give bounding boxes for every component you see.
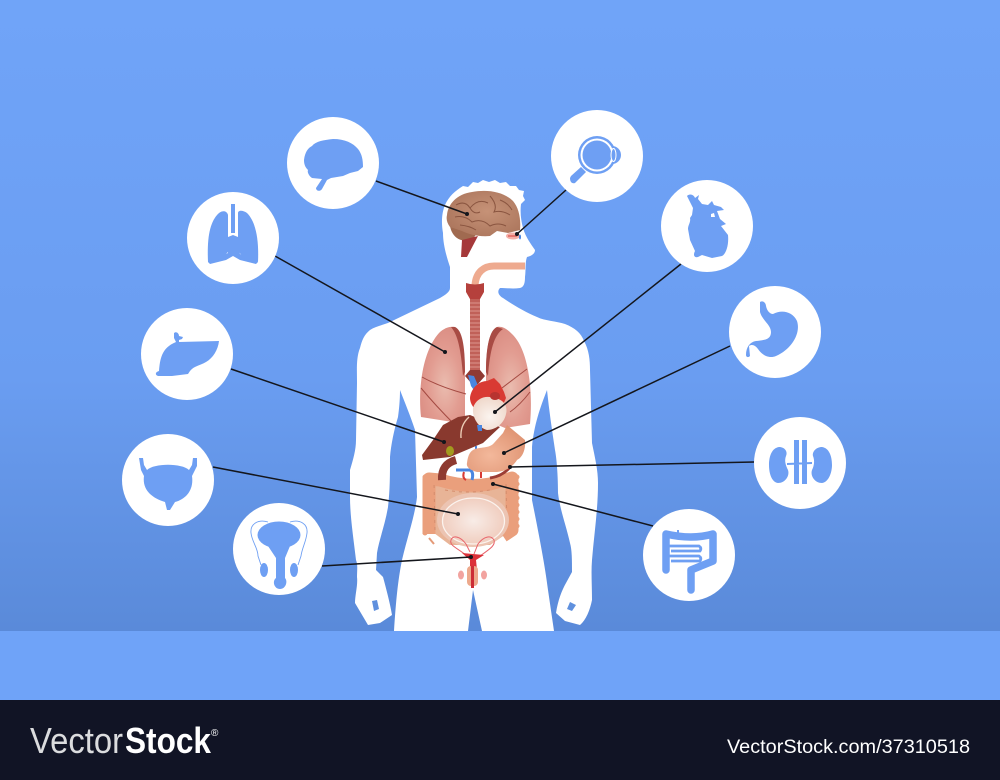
large intestine xyxy=(425,475,517,545)
bladder xyxy=(437,493,509,547)
reproductive organs xyxy=(451,537,494,588)
liver xyxy=(422,415,500,460)
logo text: Vector xyxy=(30,720,123,761)
icon: bladder xyxy=(122,434,214,526)
thyroid and trachea xyxy=(465,283,485,384)
pharynx tube xyxy=(475,266,525,285)
organ group xyxy=(420,191,531,588)
kidneys and vessels xyxy=(442,446,510,480)
leader lines xyxy=(213,181,754,566)
lungs xyxy=(420,327,531,428)
icon: brain xyxy=(287,117,379,209)
icon: kidneys xyxy=(754,417,846,509)
icon: stomach xyxy=(729,286,821,378)
floor band xyxy=(0,631,1000,700)
icon: lungs xyxy=(187,192,279,284)
hand marks xyxy=(372,600,576,611)
icon: eye with magnifier xyxy=(551,110,643,202)
logo text xyxy=(30,720,219,761)
icon: prostate xyxy=(233,503,325,595)
eye xyxy=(506,232,521,240)
icon: liver xyxy=(141,308,233,400)
heart xyxy=(468,375,506,431)
stomach xyxy=(467,425,525,472)
logo text: ® xyxy=(211,728,219,739)
brain xyxy=(447,191,520,257)
human body silhouette xyxy=(350,180,598,631)
logo text: Stock xyxy=(125,720,212,761)
icon: heart xyxy=(661,180,753,272)
image id text: VectorStock.com/37310518 xyxy=(727,737,970,758)
icon: intestines xyxy=(643,509,735,601)
footer bar xyxy=(0,700,1000,780)
